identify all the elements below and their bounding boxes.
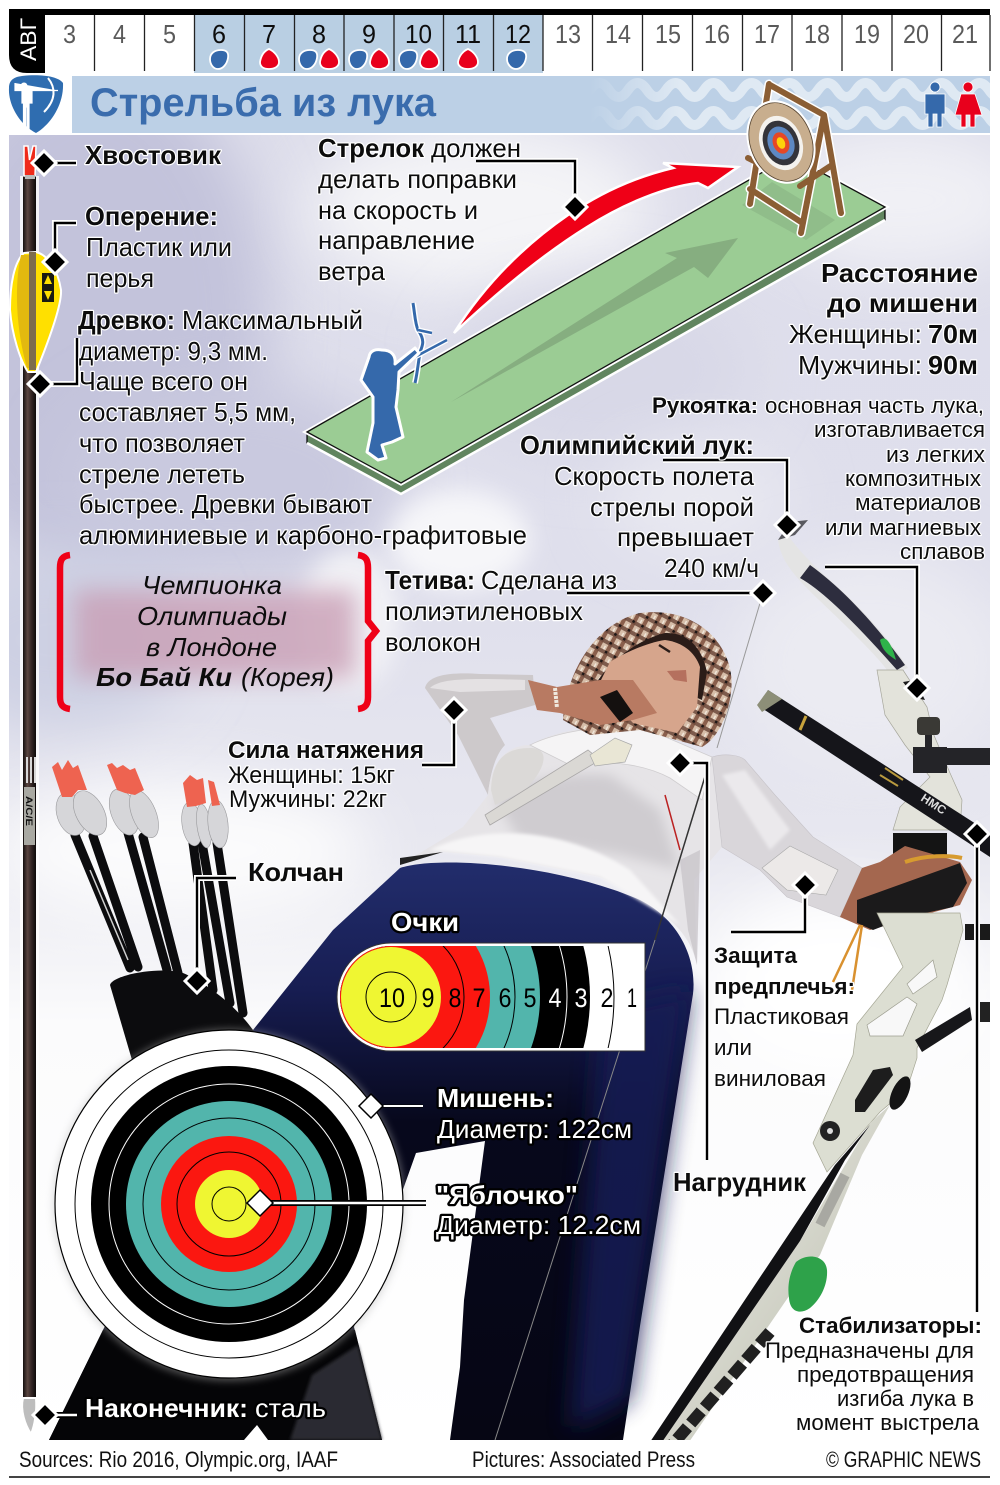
callout: stabilizers <box>965 822 989 1312</box>
day numbers: 20 <box>903 19 929 49</box>
callout: quiver <box>185 878 236 993</box>
callout: nock <box>32 151 77 175</box>
sources: Sources: Rio 2016, Olympic.org, IAAF <box>19 1447 338 1472</box>
score numbers: 5 <box>524 983 536 1013</box>
label: draw weight: Женщины: 15кг <box>228 762 395 789</box>
day numbers: 9 <box>362 19 376 49</box>
label: olympic bow: Скорость полета <box>554 461 755 491</box>
label: grip: сплавов <box>900 539 985 564</box>
label: distance: до мишени <box>827 288 978 318</box>
callout: bullseye <box>247 1190 426 1216</box>
icon: female athlete <box>955 82 982 127</box>
target shadow <box>742 182 835 240</box>
callout: arrowhead <box>33 1403 77 1427</box>
stabilizer rod upper: HMC <box>918 791 949 818</box>
range top <box>307 156 885 483</box>
range white outline <box>307 156 885 483</box>
callout: archer <box>476 161 587 219</box>
label: bowstring: полиэтиленовых <box>385 596 583 626</box>
score numbers: 4 <box>548 983 562 1013</box>
label: draw weight <box>228 737 424 813</box>
callout: target <box>359 1094 423 1118</box>
label: fletching: Пластик или <box>86 232 232 262</box>
day numbers: 11 <box>455 19 481 49</box>
stabilizer rod lower <box>915 1007 972 1052</box>
champion text: Олимпиады <box>137 601 287 631</box>
champion callout <box>60 555 376 709</box>
label: archer note: делать поправки <box>318 164 517 194</box>
phone <box>600 690 633 722</box>
champion text: Бо Бай Ки <box>96 662 232 692</box>
label: shaft: диаметр: 9,3 мм. <box>79 336 268 366</box>
bottom notch <box>244 1425 268 1440</box>
label: stabilizers: Предназначены для <box>765 1338 974 1363</box>
callout: fletching <box>43 223 77 274</box>
photo background: sky <box>9 135 990 990</box>
eye <box>659 645 670 652</box>
banner wave pattern <box>590 76 990 133</box>
title banner <box>9 75 990 133</box>
callout: chest guard <box>668 751 707 1160</box>
label: shaft <box>78 305 527 550</box>
label: distance: Женщины: <box>789 319 922 349</box>
label: target: Мишень: <box>437 1083 554 1113</box>
callout: bowstring <box>567 581 775 605</box>
belt <box>400 852 443 865</box>
bowstring <box>716 604 760 748</box>
label: olympic bow: стрелы порой <box>590 492 754 522</box>
score numbers: 2 <box>600 983 614 1013</box>
tip <box>22 1398 36 1434</box>
label: arm guard: Пластиковая <box>714 1004 849 1029</box>
label: grip: основная часть лука, <box>765 393 984 418</box>
label: shaft: Максимальный <box>182 305 363 335</box>
icon: male athlete <box>925 82 945 127</box>
callout: arm guard <box>731 873 817 932</box>
medal markers <box>210 49 526 69</box>
hat <box>563 612 732 747</box>
label: arm guard: виниловая <box>714 1066 826 1091</box>
banner background <box>72 76 990 133</box>
label: shaft: алюминиевые и карбоно-графитовые <box>79 520 527 550</box>
label: stabilizers: Стабилизаторы: <box>799 1313 982 1338</box>
icon: archery pictogram <box>9 75 63 133</box>
hand and wrist <box>528 680 657 725</box>
shaft <box>20 176 39 1406</box>
day numbers: 8 <box>312 19 326 49</box>
left bracket <box>60 555 70 709</box>
day numbers: 5 <box>163 19 176 49</box>
large target <box>53 1029 405 1381</box>
label: olympic bow: Олимпийский лук: <box>520 430 754 460</box>
label: stabilizers: предотвращения <box>797 1362 974 1387</box>
label: bowstring: волокон <box>385 627 481 657</box>
raised arm <box>425 673 535 795</box>
day numbers: 18 <box>804 19 830 49</box>
sling <box>905 856 962 862</box>
callout: shaft <box>28 338 77 396</box>
label: arrowhead: сталь <box>255 1393 326 1423</box>
label: arm guard: Защита <box>714 943 797 968</box>
calendar top bar <box>9 9 990 15</box>
arrow: flight path <box>454 163 738 333</box>
day numbers: 12 <box>505 19 531 49</box>
score numbers: 3 <box>574 983 588 1013</box>
score band <box>336 910 646 1052</box>
label: draw weight: Мужчины: 22кг <box>229 786 387 813</box>
label: shaft: быстрее. Древки бывают <box>79 489 372 519</box>
label: arm guard: или <box>714 1035 752 1060</box>
score numbers: 1 <box>627 983 637 1013</box>
label: target <box>437 1083 632 1144</box>
label: archer note: Стрелок <box>318 133 425 163</box>
label: arrowhead <box>85 1393 326 1423</box>
label: distance: 70м <box>928 319 978 349</box>
label: olympic bow: превышает <box>617 522 754 552</box>
label: shaft: составляет 5,5 мм, <box>79 397 296 427</box>
label: quiver: Колчан <box>248 857 344 887</box>
shirt <box>400 726 722 965</box>
month tab <box>9 15 45 73</box>
long arrow specimen: A/C/E <box>24 796 34 826</box>
footer <box>9 1447 990 1478</box>
day numbers: 21 <box>952 19 978 49</box>
label: distance: 90м <box>928 350 978 380</box>
label: shaft: что позволяет <box>79 428 245 458</box>
label: grip <box>652 393 986 564</box>
champion text <box>96 570 334 692</box>
label: nock: Хвостовик <box>85 140 222 170</box>
label: archer note: направление <box>318 225 475 255</box>
trouser navy highlight <box>570 990 690 1430</box>
day numbers: 15 <box>655 19 681 49</box>
day dividers <box>94 15 990 71</box>
label: arm guard: предплечья: <box>714 974 855 999</box>
label: target: Диаметр: 122см <box>437 1114 632 1144</box>
picture credit: Pictures: Associated Press <box>472 1447 695 1472</box>
nock <box>24 146 36 176</box>
footer rule <box>9 1476 990 1478</box>
score band rings <box>336 942 646 1052</box>
score numbers <box>379 983 637 1013</box>
label: distance <box>789 258 978 380</box>
trousers <box>49 863 694 1440</box>
day numbers: 13 <box>555 19 581 49</box>
lips <box>667 670 687 682</box>
label: bullseye: Диаметр: 12.2см <box>436 1210 641 1240</box>
bow riser upper <box>877 670 962 830</box>
label: grip: или магниевых <box>825 515 982 540</box>
label: archer note: ветра <box>318 256 386 286</box>
score numbers: 9 <box>422 983 434 1013</box>
banner wave fade <box>590 76 680 133</box>
archer silhouette <box>361 303 447 460</box>
day numbers: 6 <box>212 19 226 49</box>
score numbers: 6 <box>498 983 512 1013</box>
bow green knob <box>788 1256 827 1312</box>
label: arrowhead: Наконечник: <box>85 1393 248 1423</box>
right bracket <box>358 555 376 709</box>
hand on grip <box>840 846 972 930</box>
champion text: в Лондоне <box>146 632 277 662</box>
stabilizer rod upper <box>757 690 990 857</box>
day numbers <box>63 19 978 49</box>
label: fletching: перья <box>86 263 154 293</box>
callout: draw weight <box>422 698 466 765</box>
label: grip: из легких <box>886 442 986 467</box>
face <box>600 640 700 733</box>
score numbers: 7 <box>472 983 486 1013</box>
riser slot <box>903 680 925 700</box>
label: olympic bow <box>520 430 759 583</box>
dark lower leg <box>49 1330 382 1440</box>
quiver <box>110 970 254 1060</box>
day numbers: 16 <box>704 19 730 49</box>
label: bullseye: "Яблочко" <box>436 1180 578 1210</box>
label: fletching: Оперение: <box>85 201 218 231</box>
day numbers: 4 <box>113 19 126 49</box>
label: stabilizers: изгиба лука в <box>837 1386 974 1411</box>
day numbers: 17 <box>754 19 780 49</box>
bow riser lower <box>813 913 963 1172</box>
archer photo <box>49 520 990 1445</box>
long arrow specimen <box>10 146 61 1434</box>
callout: grip <box>825 567 929 700</box>
label: grip: Рукоятка: <box>652 393 758 418</box>
callout: olympic bow <box>663 460 799 537</box>
bracelet <box>555 688 557 708</box>
day numbers: 3 <box>63 19 76 49</box>
label: bowstring <box>385 565 617 657</box>
label: grip: материалов <box>855 490 981 515</box>
label: archer note: на скорость и <box>318 195 478 225</box>
label: archer note <box>318 133 521 286</box>
day numbers: 19 <box>854 19 880 49</box>
label: bowstring: Сделана из <box>481 565 617 595</box>
ground arrow <box>451 238 738 402</box>
label: bowstring: Тетива: <box>385 565 475 595</box>
range side <box>307 207 885 494</box>
label: shaft: стреле лететь <box>79 459 245 489</box>
label: stabilizers <box>765 1313 982 1435</box>
fletching <box>10 252 61 372</box>
champion text: Чемпионка <box>142 570 282 600</box>
day numbers: 10 <box>405 19 432 49</box>
calendar strip <box>9 9 990 73</box>
month tab: АВГ <box>16 18 41 61</box>
champion text: (Корея) <box>241 662 334 692</box>
label: arm guard <box>714 943 855 1091</box>
target stand <box>734 84 841 233</box>
hair <box>598 633 707 700</box>
range white lower edge <box>307 220 885 494</box>
label: chest guard: Нагрудник <box>673 1167 807 1197</box>
sleeve <box>712 755 862 917</box>
shaft bands <box>24 757 36 845</box>
grey quiver strap <box>290 1345 382 1440</box>
label: fletching <box>85 201 232 293</box>
day numbers: 14 <box>605 19 631 49</box>
bow lower limb <box>648 1105 890 1445</box>
highlighted competition days <box>194 15 543 73</box>
quiver arrows <box>51 760 243 1013</box>
score numbers: 8 <box>448 983 462 1013</box>
grip <box>857 863 967 930</box>
label: draw weight: Сила натяжения <box>228 737 424 764</box>
label: stabilizers: момент выстрела <box>796 1410 979 1435</box>
score band heading: Очки <box>391 907 459 937</box>
label: shaft: Чаще всего он <box>79 366 248 396</box>
riser clamp <box>913 717 990 773</box>
label: bullseye <box>436 1180 641 1240</box>
label: grip: композитных <box>845 466 982 491</box>
score numbers: 10 <box>379 983 405 1013</box>
label: distance: Расстояние <box>821 258 978 288</box>
green shooting range <box>307 156 885 494</box>
title: Стрельба из лука <box>90 81 437 125</box>
label: grip: изготавливается <box>814 417 985 442</box>
label: archer note: должен <box>431 133 521 163</box>
grip block <box>893 833 947 855</box>
label: distance: Мужчины: <box>798 350 922 380</box>
label: olympic bow: 240 км/ч <box>664 553 759 583</box>
bow upper limb <box>778 520 908 675</box>
day numbers: 7 <box>262 19 276 49</box>
label: shaft: Древко: <box>78 305 175 335</box>
